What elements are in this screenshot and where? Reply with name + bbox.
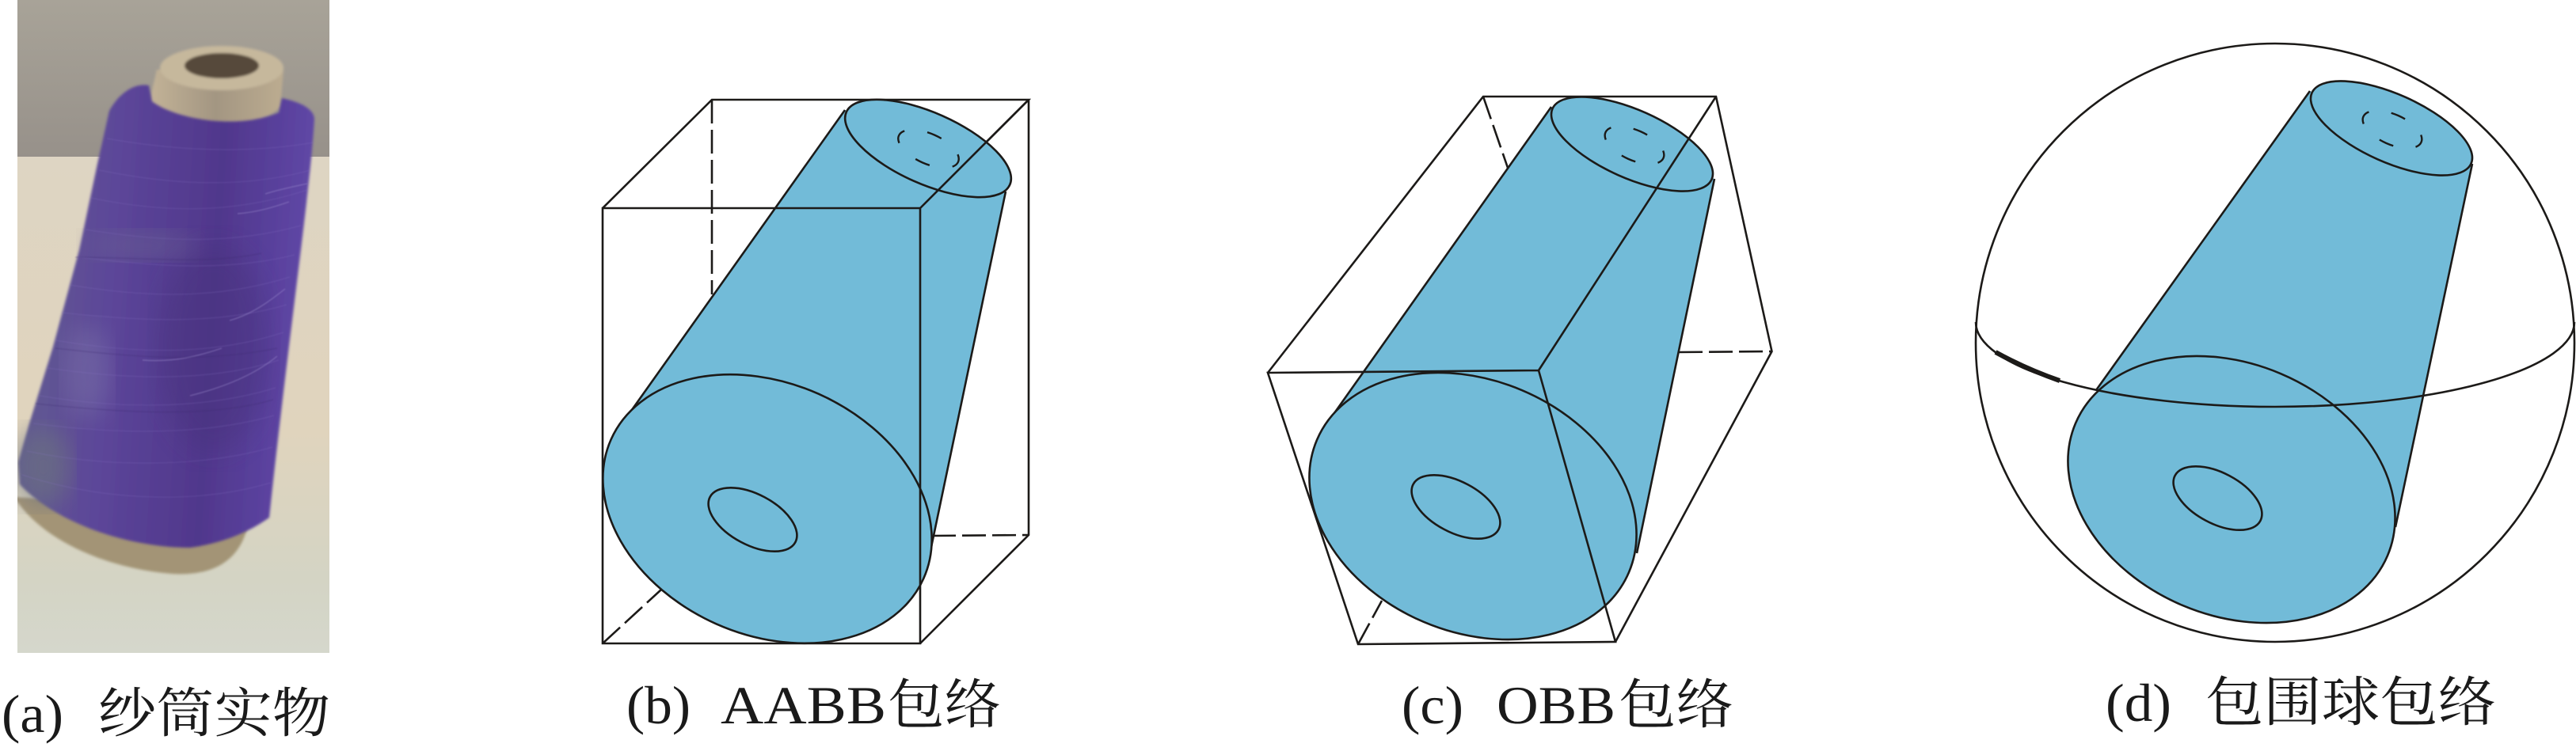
panel d: bounding sphere envelope [1976, 44, 2574, 733]
cone [560, 79, 1025, 693]
yarn shading [17, 184, 307, 513]
back edges of oriented box [1268, 97, 1772, 644]
front edges of oriented box [1268, 97, 1716, 644]
cone [1268, 78, 1726, 688]
label c: (c) [1402, 675, 1463, 735]
front edges of box [603, 100, 1029, 643]
label b: AABB [721, 675, 886, 735]
panel a: yarn bobbin photo [2, 0, 330, 744]
bounding sphere [1976, 44, 2574, 642]
label d: (d) [2106, 673, 2171, 733]
yarn thread lines [34, 264, 244, 480]
label c [1402, 675, 1733, 735]
label a: (a) [2, 684, 63, 744]
panel c: OBB envelope [1268, 78, 1772, 735]
bobbin base tube [14, 497, 247, 574]
label b [626, 675, 1001, 735]
label b: (b) [626, 675, 691, 735]
label d: 包围球包络 [2205, 673, 2496, 733]
top of cardboard tube [147, 46, 283, 128]
label c: 包络 [1619, 675, 1733, 735]
label b: 包络 [888, 675, 1001, 735]
panel b: AABB envelope [560, 79, 1029, 735]
cone [2026, 62, 2485, 671]
label c: OBB [1497, 675, 1615, 735]
label a [2, 684, 330, 744]
label a: 纱筒实物 [98, 684, 330, 744]
label d [2106, 673, 2496, 733]
purple yarn body [18, 85, 314, 548]
back edges of box [603, 100, 1029, 643]
photo of purple yarn bobbin [14, 0, 329, 653]
